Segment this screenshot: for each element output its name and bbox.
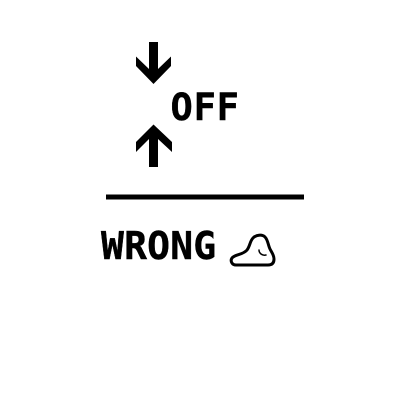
icon: foot outline xyxy=(231,235,274,265)
icon: up arrow xyxy=(136,124,172,167)
divider bar xyxy=(106,194,304,200)
label: OFF: OFF xyxy=(170,86,240,129)
label: WRONG: WRONG xyxy=(101,224,216,268)
icon: down arrow xyxy=(136,42,171,84)
